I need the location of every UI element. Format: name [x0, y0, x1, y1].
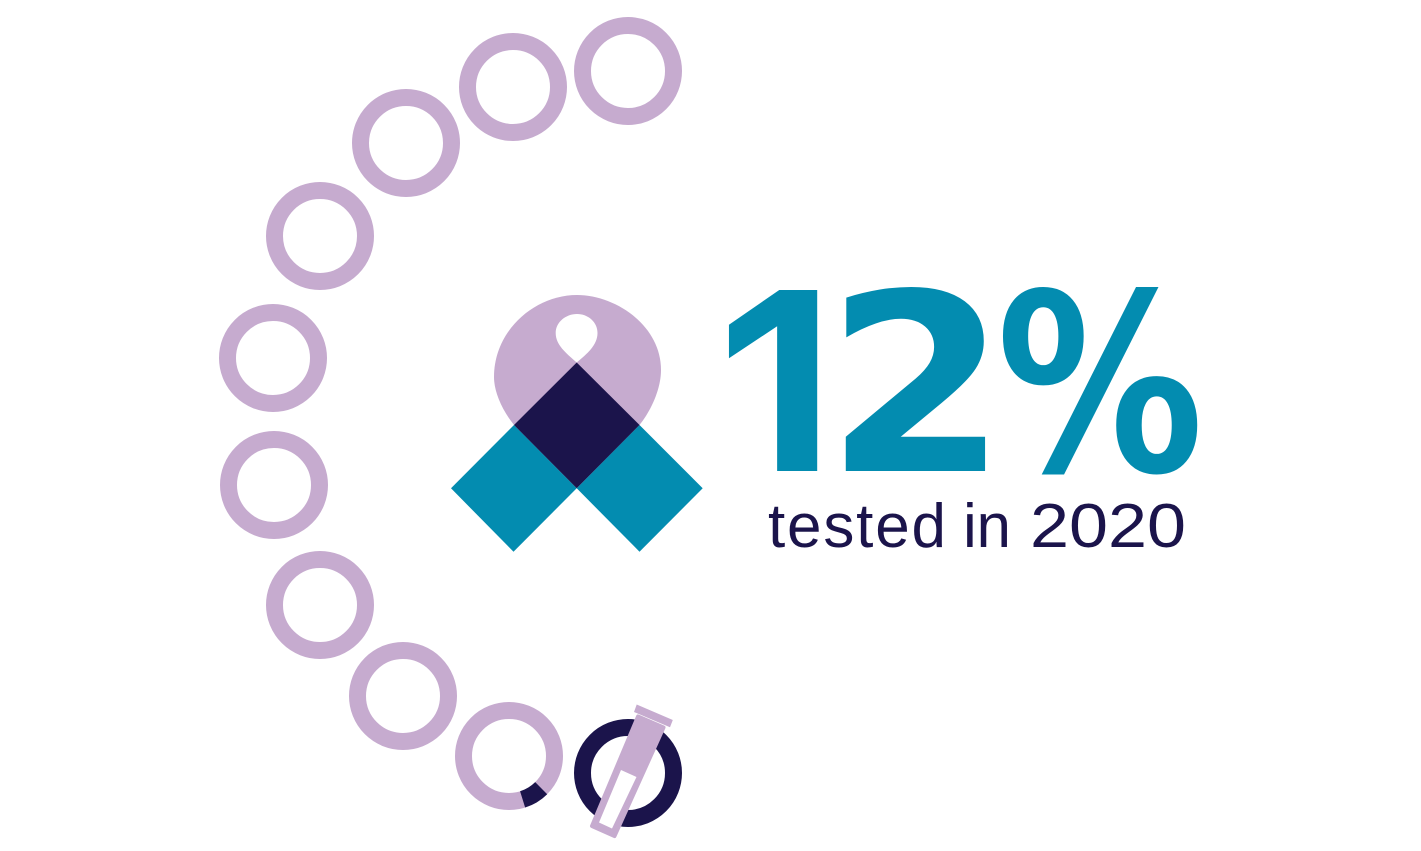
headline: 12%	[728, 287, 1198, 474]
progress rings	[228, 26, 674, 818]
tube body	[592, 716, 664, 836]
word: tested: tested	[768, 492, 946, 561]
infographic	[219, 17, 1198, 838]
ring 4	[274, 190, 366, 282]
ring 9	[464, 710, 554, 802]
ribbon right tail	[577, 425, 703, 552]
word: 2020: 2020	[1030, 492, 1186, 561]
ring 8	[358, 650, 448, 742]
ribbon centre	[514, 362, 640, 488]
tube window	[599, 770, 636, 828]
digit 1: 1	[709, 222, 871, 570]
percent sign: %	[996, 241, 1204, 530]
ribbon hole	[556, 314, 598, 362]
ring 5	[228, 312, 318, 404]
ring 6	[228, 440, 320, 530]
ring 2	[468, 42, 558, 132]
ring 9 dark segment	[523, 788, 541, 799]
subtitle	[768, 492, 1186, 561]
word: in: in	[963, 492, 1011, 561]
tube cap	[634, 704, 673, 727]
ring 7	[274, 560, 366, 650]
ring 1	[582, 26, 674, 116]
ribbon left tail	[451, 425, 577, 552]
ring 10 dark	[582, 728, 674, 818]
ring 3	[360, 98, 452, 188]
icon: awareness ribbon	[451, 295, 703, 552]
ribbon loop	[494, 295, 661, 488]
icon: test tube	[592, 704, 673, 836]
digit 2: 2	[825, 242, 1008, 530]
